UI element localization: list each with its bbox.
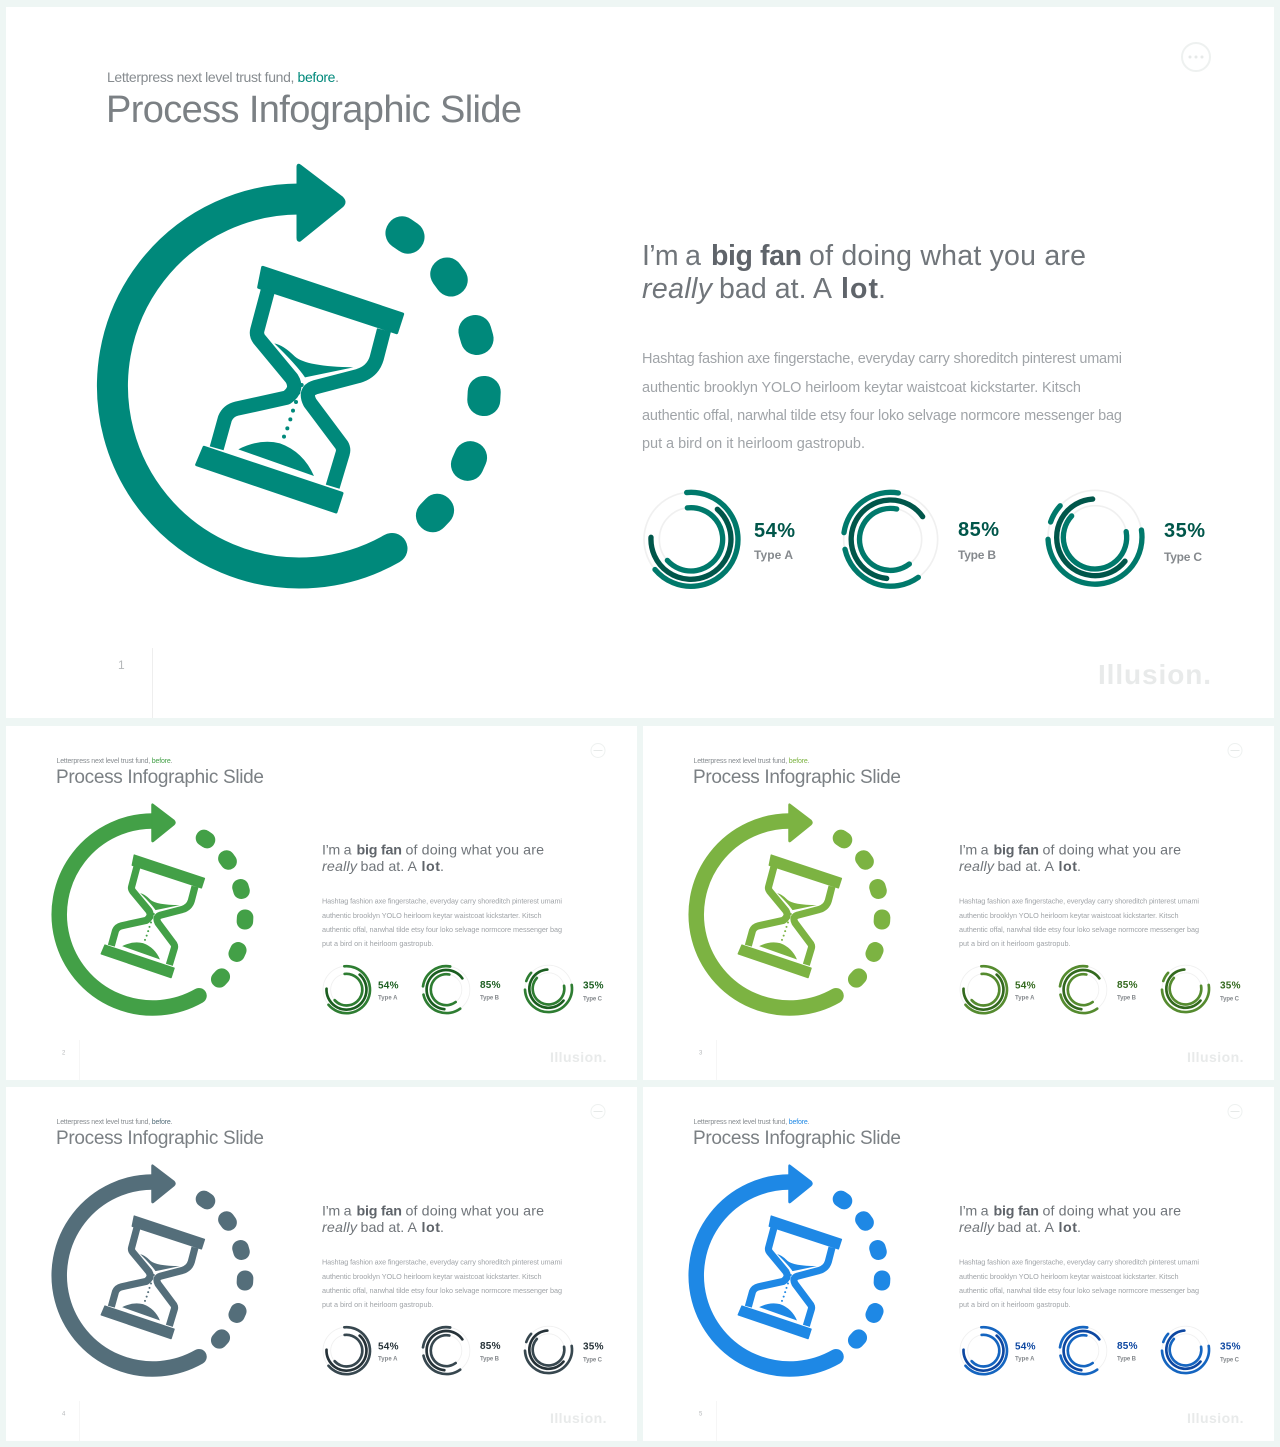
slide 5 body text: authentic brooklyn YOLO heirloom keytar waistcoat kickstarter. Kitsch xyxy=(959,1272,1178,1281)
slide 2 label 85% Type B: 85% xyxy=(480,980,501,991)
slide 3 label 85% Type B: 85% xyxy=(1117,980,1138,991)
slide 1 label 85% Type B xyxy=(958,519,999,562)
slide 3 headline: big fan xyxy=(994,842,1039,858)
slide 1 body text: put a bird on it heirloom gastropub. xyxy=(642,436,865,452)
slide 4: slate slide xyxy=(6,1087,637,1441)
slide 2 headline line 2: lot xyxy=(422,859,440,875)
slide 1 headline line 2: bad at. A xyxy=(719,273,832,305)
slide 3 ring charts and labels xyxy=(960,965,1241,1013)
slide 4 ring charts and labels xyxy=(323,1326,604,1374)
slide 3 panel xyxy=(643,726,1274,1080)
slide 3 body text: authentic brooklyn YOLO heirloom keytar waistcoat kickstarter. Kitsch xyxy=(959,911,1178,920)
slide 5 label 35% Type C xyxy=(1220,1342,1241,1364)
slide 3 body text: put a bird on it heirloom gastropub. xyxy=(959,939,1070,948)
slide 5 title: Process Infographic Slide xyxy=(693,1128,901,1149)
slide 3 headline line 2: . xyxy=(1077,859,1081,875)
slide 2 headline: I’m a xyxy=(322,842,352,858)
slide 2 title: Process Infographic Slide xyxy=(56,767,264,788)
slide 4 headline line 2: bad at. A xyxy=(360,1220,417,1236)
slide 3 label 35% Type C: 35% xyxy=(1220,980,1241,992)
slide 1 headline: of doing what you are xyxy=(809,240,1086,272)
slide 2 ring chart C xyxy=(525,965,572,1012)
slide 1 page number: 1 xyxy=(118,658,125,672)
slide 2 headline line 2: bad at. A xyxy=(360,859,417,875)
slide 3 menu icon xyxy=(1228,744,1242,758)
slide 5 body text: authentic offal, narwhal tilde etsy four loko selvage normcore messenger bag xyxy=(959,1286,1199,1295)
slide 1 label 85% Type B: Type B xyxy=(958,548,996,562)
slide 1 icon: hourglass with circular arrow xyxy=(112,165,502,573)
slide 5 headline line 2: . xyxy=(1077,1220,1081,1236)
slide 2 ring charts and labels xyxy=(323,965,604,1013)
slide 2 text and charts xyxy=(322,842,604,1013)
slide 1 headline line 2: lot xyxy=(841,273,878,305)
slide 5 ring charts and labels xyxy=(960,1326,1241,1374)
slide 5 headline: I’m a xyxy=(959,1204,989,1220)
slide 4 title: Process Infographic Slide xyxy=(56,1128,264,1149)
slide 5 label 85% Type B: 85% xyxy=(1117,1341,1138,1352)
slide 2 headline: big fan xyxy=(356,842,402,858)
slide 4 text and charts xyxy=(322,1204,604,1374)
slide 4 ring chart B xyxy=(423,1327,470,1374)
slide 4 label 85% Type B: Type B xyxy=(480,1356,500,1362)
slide 3 label 54% Type A xyxy=(1015,980,1036,1002)
slide 3 icon: hourglass with circular arrow xyxy=(696,804,891,1008)
slide 2 headline line 2: . xyxy=(440,859,444,875)
slide 4 label 54% Type A: Type A xyxy=(378,1356,398,1362)
slide 3 headline line 2: really xyxy=(959,859,995,875)
slide 5 icon: hourglass with circular arrow xyxy=(696,1165,891,1369)
slide 4 body text xyxy=(322,1258,562,1309)
slide 2 headline: of doing what you are xyxy=(406,842,544,858)
slide 3 tagline: Letterpress next level trust fund, before. xyxy=(694,758,810,765)
slide 1 label 54% Type A xyxy=(754,520,795,562)
slide 4 body text: put a bird on it heirloom gastropub. xyxy=(322,1300,434,1309)
slide 5 label 85% Type B xyxy=(1117,1341,1138,1362)
slide 1 brand: Illusion. xyxy=(1098,659,1211,690)
slide 1 tagline: Letterpress next level trust fund, before. xyxy=(107,69,339,85)
slide 2 label 35% Type C: Type C xyxy=(583,996,603,1002)
slide 4 headline: of doing what you are xyxy=(406,1204,544,1220)
slide 4 panel xyxy=(6,1087,637,1441)
slide 5 text and charts xyxy=(959,1204,1241,1374)
slide 4 label 54% Type A: 54% xyxy=(378,1342,399,1352)
slide 1 label 54% Type A: 54% xyxy=(754,520,795,542)
slide 4 icon: hourglass with circular arrow xyxy=(59,1165,254,1369)
slide 4 label 35% Type C: Type C xyxy=(583,1358,603,1364)
slide 5 label 35% Type C: Type C xyxy=(1220,1358,1240,1364)
slide 1 body text xyxy=(642,351,1122,452)
slide 1 label 35% Type C: Type C xyxy=(1164,550,1202,564)
slide 4 headline line 2: really xyxy=(322,1220,358,1236)
slide 3 page number: 3 xyxy=(699,1050,703,1056)
slide 4 ring chart A xyxy=(323,1327,370,1374)
slide 4 body text: authentic offal, narwhal tilde etsy four loko selvage normcore messenger bag xyxy=(322,1286,562,1295)
slide 2 tagline: Letterpress next level trust fund, before. xyxy=(56,758,173,765)
slide 4 tagline: Letterpress next level trust fund, before. xyxy=(56,1119,173,1126)
slide 3 label 54% Type A: Type A xyxy=(1015,996,1035,1002)
slide 1 headline: I’m a xyxy=(642,240,701,272)
slide 5 label 35% Type C: 35% xyxy=(1220,1342,1241,1352)
slide 4 label 54% Type A xyxy=(378,1342,399,1362)
slide 3 headline line 2: bad at. A xyxy=(998,859,1054,875)
slide 1 label 85% Type B: 85% xyxy=(958,519,999,541)
slide 3 ring chart C xyxy=(1162,965,1209,1012)
slide 5 ring chart C xyxy=(1162,1326,1209,1373)
slide 5 body text xyxy=(959,1258,1199,1309)
slide 4 label 85% Type B xyxy=(480,1341,501,1362)
slide 1 title: Process Infographic Slide xyxy=(106,89,522,131)
slide 3 title: Process Infographic Slide xyxy=(693,767,901,788)
slide 2 body text: put a bird on it heirloom gastropub. xyxy=(322,939,434,948)
slide 5 body text: put a bird on it heirloom gastropub. xyxy=(959,1300,1070,1309)
slide 1 label 54% Type A: Type A xyxy=(754,548,793,562)
slide 3 label 85% Type B xyxy=(1117,980,1138,1002)
slide 5 headline line 2: really xyxy=(959,1220,995,1236)
slide 4 label 35% Type C: 35% xyxy=(583,1342,604,1352)
slide 2 label 54% Type A xyxy=(378,980,399,1002)
slide 5 label 85% Type B: Type B xyxy=(1117,1356,1137,1362)
slide 3 headline line 2: lot xyxy=(1058,859,1077,875)
slide 1 headline line 2: . xyxy=(878,273,886,305)
slide 3 brand: Illusion. xyxy=(1187,1049,1244,1065)
slide 3 label 35% Type C: Type C xyxy=(1220,996,1240,1002)
slide 1 ring chart A xyxy=(644,492,738,586)
slide 3 ring chart B xyxy=(1060,966,1107,1013)
slide 4 body text: authentic brooklyn YOLO heirloom keytar waistcoat kickstarter. Kitsch xyxy=(322,1272,542,1281)
slide 4 label 35% Type C xyxy=(583,1342,604,1364)
slide 5 page number: 5 xyxy=(699,1412,703,1418)
slide 2: green slide xyxy=(6,726,637,1080)
slide 1 panel xyxy=(6,7,1274,718)
slide 3 ring chart A xyxy=(960,966,1007,1013)
slide 4 menu icon xyxy=(591,1104,605,1118)
slide 1 body text: authentic offal, narwhal tilde etsy four loko selvage normcore messenger bag xyxy=(642,408,1122,424)
slide 3 label 35% Type C xyxy=(1220,980,1241,1002)
slide 4 page number: 4 xyxy=(62,1412,66,1418)
slide 3 label 85% Type B: Type B xyxy=(1117,996,1137,1002)
slide 2 panel xyxy=(6,726,637,1080)
slide 4 headline: I’m a xyxy=(322,1204,352,1220)
slide 2 body text: Hashtag fashion axe fingerstache, everyday carry shoreditch pinterest umami xyxy=(322,896,562,906)
slide 5 headline line 2: bad at. A xyxy=(998,1220,1054,1236)
slide 2 label 54% Type A: 54% xyxy=(378,980,399,992)
slide 2 ring chart B xyxy=(423,966,470,1013)
slide 5 label 54% Type A: Type A xyxy=(1015,1356,1035,1362)
slide 4 headline: big fan xyxy=(356,1204,402,1220)
slide 3 headline: of doing what you are xyxy=(1042,842,1181,858)
slide 3 body text: authentic offal, narwhal tilde etsy four loko selvage normcore messenger bag xyxy=(959,925,1199,934)
slide 5 headline: of doing what you are xyxy=(1042,1204,1181,1220)
slide 1 ring chart C xyxy=(1048,490,1142,584)
slide 4 headline line 2: lot xyxy=(422,1220,440,1236)
slide 4 label 85% Type B: 85% xyxy=(480,1341,501,1352)
slide 5 brand: Illusion. xyxy=(1187,1410,1244,1426)
slide 2 label 85% Type B xyxy=(480,980,501,1002)
slide 2 icon: hourglass with circular arrow xyxy=(59,804,254,1008)
slide 5 headline line 2: lot xyxy=(1058,1220,1077,1236)
slide 2 brand: Illusion. xyxy=(550,1049,606,1065)
slide 2 body text: authentic offal, narwhal tilde etsy four loko selvage normcore messenger bag xyxy=(322,925,562,934)
slide 2 label 35% Type C xyxy=(583,980,604,1002)
slide 2 label 85% Type B: Type B xyxy=(480,996,500,1002)
slide 1 ring chart B xyxy=(844,492,938,586)
slide 3 label 54% Type A: 54% xyxy=(1015,980,1036,992)
slide 3 headline: I’m a xyxy=(959,842,989,858)
slide 3: light green slide xyxy=(643,726,1274,1080)
slide 3 text and charts xyxy=(959,842,1241,1013)
slide 4 body text: Hashtag fashion axe fingerstache, everyday carry shoreditch pinterest umami xyxy=(322,1258,562,1266)
slide 2 menu icon xyxy=(591,744,605,758)
slide 1: teal large slide xyxy=(6,7,1274,718)
slide 2 label 35% Type C: 35% xyxy=(583,980,604,992)
slide 4 ring chart C xyxy=(525,1326,572,1373)
slide 1 body text: Hashtag fashion axe fingerstache, everyday carry shoreditch pinterest umami xyxy=(642,351,1122,367)
slide 1 body text: authentic brooklyn YOLO heirloom keytar waistcoat kickstarter. Kitsch xyxy=(642,380,1081,396)
slide 5 label 54% Type A: 54% xyxy=(1015,1342,1036,1352)
slide 2 ring chart A xyxy=(323,966,370,1013)
slide 4 headline line 2: . xyxy=(440,1220,444,1236)
slide 3 body text: Hashtag fashion axe fingerstache, everyday carry shoreditch pinterest umami xyxy=(959,896,1199,906)
slide 1 headline: big fan xyxy=(711,240,802,272)
slide 5 body text: Hashtag fashion axe fingerstache, everyday carry shoreditch pinterest umami xyxy=(959,1258,1199,1266)
slide 2 body text: authentic brooklyn YOLO heirloom keytar waistcoat kickstarter. Kitsch xyxy=(322,911,542,920)
slide 2 headline line 2: really xyxy=(322,859,358,875)
slide 5: blue slide xyxy=(643,1087,1274,1441)
slide 3 body text xyxy=(959,896,1199,948)
slide 4 brand: Illusion. xyxy=(550,1410,606,1426)
slide 5 tagline: Letterpress next level trust fund, before. xyxy=(694,1119,810,1126)
slide 2 page number: 2 xyxy=(62,1050,66,1056)
slide 1 headline line 2: really xyxy=(642,273,714,305)
slide 2 body text xyxy=(322,896,562,948)
slide 1 label 35% Type C: 35% xyxy=(1164,520,1205,542)
slide 2 label 54% Type A: Type A xyxy=(378,996,398,1002)
slide 1 label 35% Type C xyxy=(1164,520,1205,564)
slide 5 panel xyxy=(643,1087,1274,1441)
slide 5 headline: big fan xyxy=(994,1204,1039,1220)
slide 5 ring chart B xyxy=(1060,1327,1107,1374)
slide 5 label 54% Type A xyxy=(1015,1342,1036,1362)
slide 5 menu icon xyxy=(1228,1104,1242,1118)
slide 1 menu icon xyxy=(1182,43,1210,71)
slide 5 ring chart A xyxy=(960,1327,1007,1374)
